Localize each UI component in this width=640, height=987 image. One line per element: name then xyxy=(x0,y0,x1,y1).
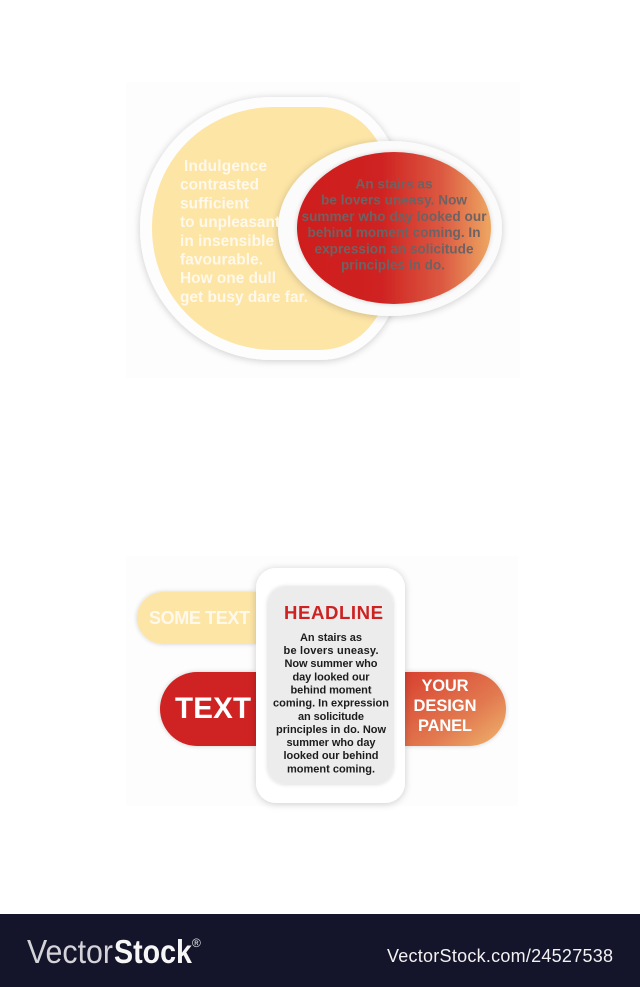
card body text: coming. In expression xyxy=(273,698,389,710)
red ellipse text: be lovers uneasy. Now xyxy=(321,192,467,208)
outer white outline of cream shape xyxy=(140,97,391,360)
cream shape text: to unpleasant xyxy=(180,214,280,231)
card body text: be lovers uneasy. xyxy=(284,645,378,657)
registered mark: ® xyxy=(192,936,201,950)
cream shape text: How one dull xyxy=(180,270,276,287)
cream shape text: get busy dare far. xyxy=(180,289,308,306)
pill: text xyxy=(160,672,256,746)
cream shape text xyxy=(180,158,308,306)
pill: your design panel: YOUR xyxy=(422,677,469,695)
pill: your design panel: PANEL xyxy=(418,717,472,735)
cream shape text: contrasted xyxy=(180,177,259,194)
cream shape text: Indulgence xyxy=(184,158,267,175)
cream shape xyxy=(152,107,378,350)
logo word: Stock: Stock xyxy=(114,933,193,970)
red ellipse text xyxy=(302,176,487,272)
card body text: looked our behind xyxy=(284,750,378,762)
card body text: an solicitude xyxy=(298,711,364,723)
red ellipse text: summer who day looked our xyxy=(302,209,487,224)
pill: some text xyxy=(137,592,256,644)
card body text: Now summer who xyxy=(284,658,378,670)
cream shape text: in insensible xyxy=(180,233,274,250)
stock id url: VectorStock.com/24527538 xyxy=(387,946,613,966)
pill: your design panel xyxy=(405,672,506,746)
white ellipse ring xyxy=(278,141,502,316)
red ellipse text: An stairs as xyxy=(356,176,432,192)
red gradient ellipse xyxy=(297,152,491,304)
card body text: day looked our xyxy=(292,671,370,683)
footer bar xyxy=(0,914,640,987)
cream shape text: favourable. xyxy=(180,252,263,268)
card body text: summer who day xyxy=(286,737,376,749)
headline: HEADLINE xyxy=(284,602,383,623)
card outer white xyxy=(256,568,405,803)
card body text xyxy=(273,632,389,775)
faint backing square xyxy=(126,556,518,806)
top diagram: overlapping cream and red shapes xyxy=(126,82,520,378)
logo word: Vector: Vector xyxy=(27,933,113,970)
cream shape text: sufficient xyxy=(180,195,249,212)
pill: text: TEXT xyxy=(175,692,251,725)
red ellipse text: principles in do. xyxy=(341,258,445,272)
red ellipse text: behind moment coming. In xyxy=(308,225,480,240)
bottom diagram: pills and central card xyxy=(126,556,518,806)
faint backing square xyxy=(126,82,520,378)
red ellipse text: expression an solicitude xyxy=(314,242,474,256)
card body text: An stairs as xyxy=(300,632,362,644)
pill: some text: SOME TEXT xyxy=(149,608,250,628)
card body text: principles in do. Now xyxy=(276,724,386,736)
card body text: moment coming. xyxy=(287,763,375,775)
card inner grey panel xyxy=(268,587,393,784)
pill: your design panel: DESIGN xyxy=(414,697,476,715)
card body text: behind moment xyxy=(290,684,372,696)
